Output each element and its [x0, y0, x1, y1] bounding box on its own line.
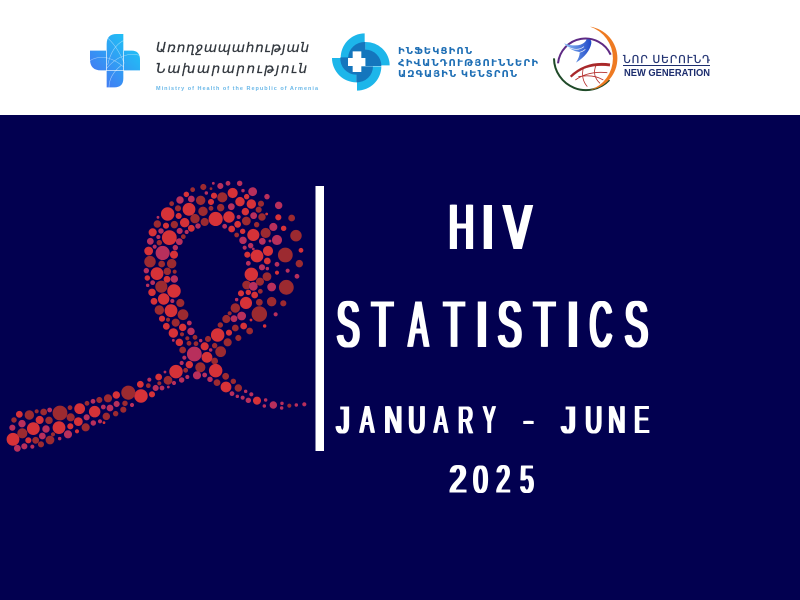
white logo header: [0, 0, 800, 115]
icon: bird and globe: [554, 27, 617, 90]
subtitle: date range: A: [433, 398, 446, 442]
title: STATISTICS: S: [334, 289, 357, 362]
subtitle: year: 5: [519, 458, 532, 501]
title: STATISTICS: A: [407, 289, 426, 362]
icon: ministry cross: [90, 34, 140, 87]
logo: National Centre for Infectious Diseases: ՀԻՎԱՆԴՈՒԹՅՈՒՆՆԵՐԻ: [398, 58, 538, 69]
ministry name in English: Ministry of Health of the Republic of Armenia: [156, 86, 319, 92]
subtitle: date range: Y: [482, 398, 494, 442]
subtitle: date range: N: [383, 398, 401, 442]
title: STATISTICS: T: [370, 289, 391, 362]
subtitle: year: 2: [448, 458, 464, 501]
subtitle: date range: R: [457, 398, 472, 442]
title: HIV: V: [502, 192, 528, 264]
logo: National Centre for Infectious Diseases: ԱԶԳԱՅԻՆ ԿԵՆՏՐՈՆ: [398, 69, 517, 80]
subtitle: year: 0: [472, 458, 487, 501]
logo: New Generation: [554, 27, 710, 90]
subtitle: date range: [334, 398, 650, 442]
title: STATISTICS: T: [532, 289, 553, 362]
subtitle: date range: J: [560, 398, 574, 442]
organisation name Armenian: ՆՈՐ ՍԵՐՈՒՆԴ: [623, 54, 710, 66]
title: STATISTICS: S: [623, 289, 646, 362]
title: HIV: [447, 192, 534, 264]
icon: pinwheel cross: [332, 33, 390, 91]
title: HIV: I: [480, 192, 491, 264]
title: STATISTICS: C: [588, 289, 610, 362]
subtitle: date range: A: [359, 398, 373, 442]
ministry name in Armenian: Առողջապահության: [156, 40, 309, 55]
logo: Ministry of Health: [90, 34, 319, 92]
logo: National Centre for Infectious Diseases: [332, 33, 538, 91]
subtitle: year: [448, 458, 534, 501]
subtitle: year: 2: [495, 458, 509, 501]
icon: dotted red ribbon: [7, 181, 306, 451]
title: STATISTICS: I: [474, 289, 485, 362]
title: STATISTICS: T: [442, 289, 462, 362]
subtitle: date range: U: [407, 398, 424, 442]
organisation name English: NEW GENERATION: [624, 67, 710, 79]
title: HIV: H: [447, 192, 472, 264]
subtitle: date range: J: [334, 398, 348, 442]
subtitle: date range: N: [607, 398, 624, 442]
subtitle: date range: -: [522, 398, 531, 442]
subtitle: date range: E: [633, 398, 648, 442]
logo: Ministry of Health: Նախարարություն: [156, 61, 307, 76]
title: STATISTICS: I: [564, 289, 576, 362]
title: STATISTICS: S: [496, 289, 520, 362]
vertical divider bar: [316, 186, 324, 451]
subtitle: date range: U: [584, 398, 601, 442]
centre name in Armenian: ԻՆՖԵԿՑԻՈՆ: [398, 46, 472, 57]
title: STATISTICS: [334, 289, 648, 362]
